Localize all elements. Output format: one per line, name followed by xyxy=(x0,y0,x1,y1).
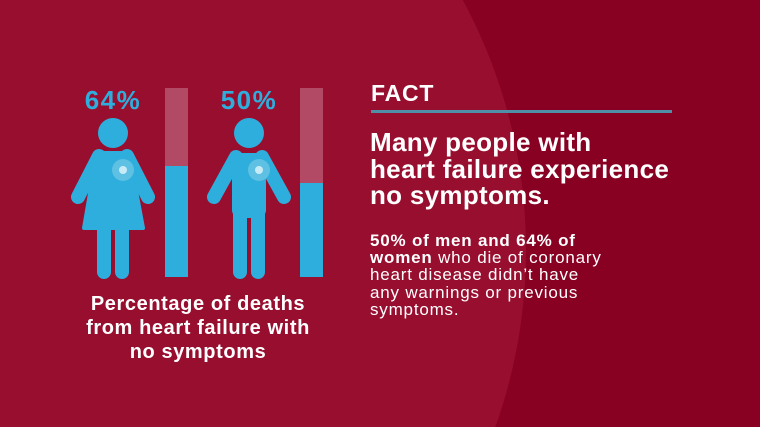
headline xyxy=(370,127,669,210)
bar: men 50% xyxy=(300,88,323,277)
body text xyxy=(370,231,602,319)
icon: man xyxy=(214,118,284,272)
body text: any warnings or previous xyxy=(370,283,578,302)
caption: Percentage of deaths xyxy=(91,293,305,315)
body text: heart disease didn’t have xyxy=(370,265,579,284)
headline: heart failure experience xyxy=(370,154,669,184)
caption: no symptoms xyxy=(130,341,266,363)
label: 64%: 64% xyxy=(85,85,141,115)
body text: 50% of men and 64% of xyxy=(370,231,576,250)
caption xyxy=(86,293,310,363)
divider line xyxy=(371,110,672,113)
heading: FACT: FACT xyxy=(371,80,434,106)
body text: women who die of coronary xyxy=(370,248,602,267)
caption: from heart failure with xyxy=(86,317,310,339)
body text: symptoms. xyxy=(370,300,459,319)
label: 50%: 50% xyxy=(221,85,277,115)
bar: women 64% xyxy=(165,88,188,277)
headline: Many people with xyxy=(370,127,591,157)
icon: woman xyxy=(78,118,148,272)
headline: no symptoms. xyxy=(370,180,550,210)
